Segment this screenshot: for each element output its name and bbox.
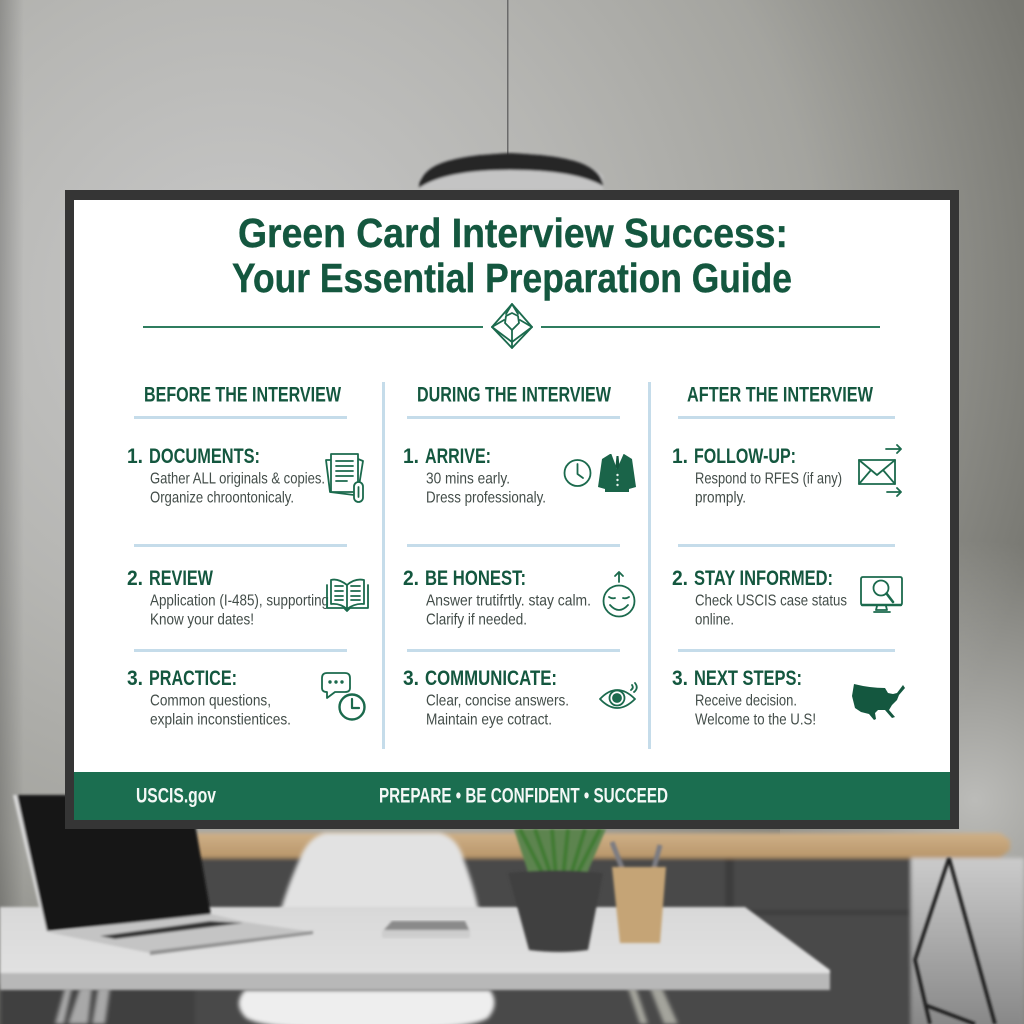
heading: during: DURING THE INTERVIEW [417, 382, 612, 406]
heading: before: BEFORE THE INTERVIEW [144, 382, 342, 406]
panel: before the interview [127, 382, 368, 728]
panel: after the interview [672, 382, 905, 728]
chair [239, 833, 495, 1024]
item: documents [127, 445, 325, 506]
icon: suit jacket [598, 453, 636, 492]
icon: map of the USA [852, 684, 905, 720]
item: communicate: COMMUNICATE: [425, 667, 557, 690]
item: review: 2. [127, 567, 143, 590]
item: be honest [403, 567, 591, 628]
item: next steps: NEXT STEPS: [694, 667, 802, 690]
item: documents: Organize chroontonicaly. [150, 490, 294, 506]
phone on desk [382, 921, 470, 938]
pendant lamp [419, 0, 603, 190]
icon: open book [327, 580, 368, 611]
back desk and cabinet [0, 833, 1024, 1024]
item: practice: Common questions, [150, 692, 271, 710]
trestle legs [915, 858, 995, 1024]
icon: smiling face with up arrow [604, 572, 634, 616]
laptop [13, 795, 313, 955]
footer source: USCIS.gov [136, 784, 216, 808]
pen cup [612, 842, 666, 943]
item: review [127, 567, 329, 628]
item: practice [127, 667, 291, 728]
icon: clock [564, 460, 590, 486]
column dividers [382, 382, 385, 749]
item: arrive: 30 mins early. [426, 470, 510, 488]
item: follow-up: Respond to RFES (if any) [695, 470, 842, 488]
item: next steps: Receive decision. [695, 692, 797, 710]
poster panel [74, 200, 950, 820]
item: practice: 3. [127, 667, 143, 690]
item: review: Application (I-485), supporting [150, 592, 329, 610]
item: be honest: 2. [403, 567, 419, 590]
item: documents: Gather ALL originals & copies. [150, 470, 325, 488]
item: arrive: Dress professionaly. [426, 490, 546, 506]
item: stay informed: Check USCIS case status [695, 592, 847, 610]
item: be honest: Clarify if needed. [426, 612, 527, 628]
item: follow-up: 1. [672, 445, 688, 468]
item: be honest: BE HONEST: [425, 567, 526, 590]
item: practice: PRACTICE: [149, 667, 237, 690]
title divider with diamond icon [143, 304, 880, 348]
icon: documents with paperclip [326, 454, 363, 502]
item: communicate: Maintain eye cotract. [426, 712, 552, 728]
panel: during the interview [403, 382, 637, 728]
item: arrive [403, 445, 546, 506]
icon: monitor with magnifying glass [861, 577, 902, 612]
poster frame [65, 190, 959, 829]
item: stay informed: STAY INFORMED: [694, 567, 833, 590]
footer band [74, 772, 950, 820]
item: stay informed: 2. [672, 567, 688, 590]
item: next steps [672, 667, 816, 728]
item: communicate [403, 667, 569, 728]
item: documents: DOCUMENTS: [149, 445, 260, 468]
item: stay informed [672, 567, 847, 628]
item: follow-up: FOLLOW-UP: [694, 445, 796, 468]
desk legs [55, 988, 678, 1024]
footer tagline: PREPARE • BE CONFIDENT • SUCCEED [379, 784, 668, 808]
item: communicate: 3. [403, 667, 419, 690]
item: communicate: Clear, concise answers. [426, 692, 569, 710]
item: follow-up: promply. [695, 490, 746, 506]
item: be honest: Answer trutifrtly. stay calm. [426, 592, 591, 610]
item: stay informed: online. [695, 612, 734, 628]
item: arrive: ARRIVE: [425, 445, 491, 468]
item: follow-up [672, 445, 842, 506]
plant and pot [508, 829, 606, 952]
item: arrive: 1. [403, 445, 419, 468]
item: next steps: 3. [672, 667, 688, 690]
title: Your Essential Preparation Guide [232, 255, 792, 301]
item: documents: 1. [127, 445, 143, 468]
item: practice: explain inconstientices. [150, 712, 291, 728]
title: Green Card Interview Success: [238, 210, 788, 256]
item: review: REVIEW [149, 567, 213, 590]
heading: after: AFTER THE INTERVIEW [687, 382, 874, 406]
icon: envelope with arrows [859, 445, 901, 496]
icon: speech bubble and clock [322, 673, 364, 720]
icon: eye with signal [600, 683, 637, 708]
item: review: Know your dates! [150, 612, 254, 628]
front desk [0, 907, 830, 990]
item: next steps: Welcome to the U.S! [695, 712, 816, 728]
title [232, 210, 792, 301]
